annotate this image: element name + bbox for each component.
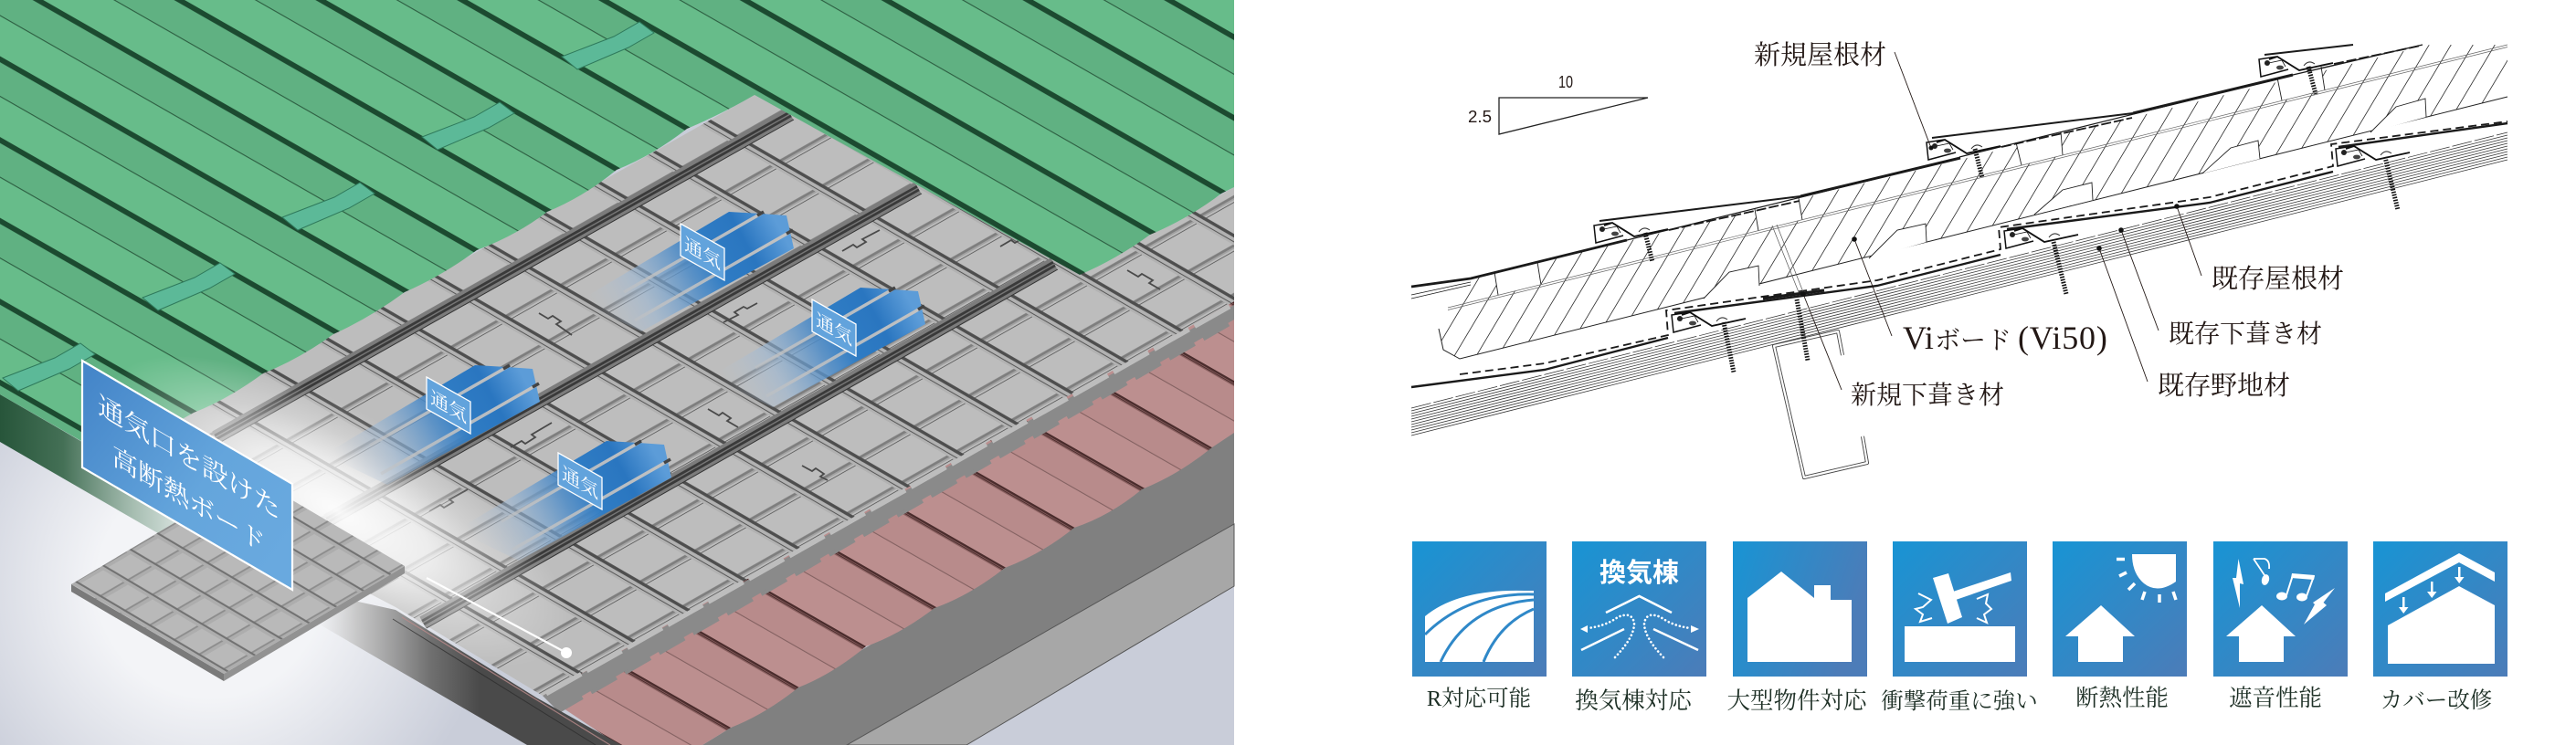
icon: 大型物件対応 [1733, 541, 1867, 677]
icon: 換気棟対応: 換気棟 [1599, 558, 1679, 588]
label: 新規下葺き材: 新規下葺き材 [1851, 381, 2004, 410]
ventilation rails [216, 114, 1058, 628]
sign: 通気: 通気 [816, 309, 852, 350]
label: 既存下葺き材: 既存下葺き材 [2169, 320, 2322, 349]
vent 4 [456, 441, 671, 561]
label: Viボード（Vi50）: Vi [1903, 320, 1934, 356]
slope triangle 10 : 2.5: 10 [1558, 73, 1573, 91]
existing pink roof [536, 301, 1234, 745]
label: 既存下葺き材 [2118, 227, 2322, 349]
panel: roof cross-section drawing [1411, 39, 2507, 477]
panel: isometric roof illustration [0, 0, 1234, 745]
label: 新規下葺き材 [1800, 291, 2004, 410]
board side edge [543, 305, 1234, 710]
slope triangle 10 : 2.5 [1468, 73, 1648, 134]
icon: カバー改修 [2373, 541, 2507, 677]
caption: 断熱性能: 断熱性能 [2075, 685, 2169, 711]
icon: 断熱性能 [2053, 541, 2187, 677]
new roof sheets [1411, 45, 2423, 299]
purlin bracket [1774, 331, 1867, 477]
label: 既存屋根材: 既存屋根材 [2212, 263, 2344, 294]
sign: 通気: 通気 [430, 386, 467, 427]
label: 既存野地材: 既存野地材 [2158, 371, 2290, 401]
label: 新規屋根材: 新規屋根材 [1754, 39, 1886, 70]
stepped board joints [429, 226, 1160, 511]
sign: 通気 [558, 453, 602, 509]
label: 新規屋根材 [1754, 39, 1933, 150]
sign: 通気 [681, 224, 724, 280]
icon: R対応可能 [1412, 541, 1547, 677]
caption: カバー改修: カバー改修 [2381, 687, 2492, 713]
single insulation board [71, 477, 405, 681]
label: Viボード（Vi50） [1852, 236, 2108, 356]
background [0, 0, 1234, 745]
caption: 遮音性能: 遮音性能 [2229, 685, 2322, 711]
sign: 通気 [427, 377, 470, 434]
hatched new board Vi50 [1439, 45, 2507, 359]
fastening clips [1594, 57, 2410, 332]
icon: 衝撃荷重に強い [1893, 541, 2027, 677]
icon: 換気棟対応 [1572, 541, 1706, 677]
existing structure dark band [702, 429, 1234, 745]
label: 既存屋根材 [2174, 204, 2344, 294]
green roof side edge [0, 394, 210, 563]
vent 3 [324, 365, 540, 485]
vent 2 [710, 288, 925, 407]
white fade over the board [63, 296, 613, 727]
label: Viボード（Vi50）: (Vi50) [2018, 320, 2108, 356]
sign: 通気: 通気 [684, 233, 721, 274]
callout: 通気口を設けた高断熱ボード [82, 361, 292, 590]
leader line with dot [427, 578, 572, 658]
callout: 通気口を設けた高断熱ボード: 通気口を設けた [98, 390, 280, 526]
existing deck boards [1411, 132, 2507, 435]
caption: R対応可能: R対応可能 [1427, 686, 1531, 711]
green roof overlap joints [3, 22, 654, 391]
grey insulation board field [111, 95, 1234, 696]
existing structure light band [847, 524, 1234, 745]
panel: feature icons [1412, 541, 2507, 714]
existing underlayment dashed line [1460, 121, 2507, 374]
label: 既存野地材 [2096, 246, 2290, 401]
existing roof sheet [1411, 123, 2507, 387]
slope triangle 10 : 2.5: 2.5 [1468, 108, 1492, 126]
sign: 通気: 通気 [562, 462, 598, 503]
caption: 大型物件対応: 大型物件対応 [1726, 687, 1868, 714]
green new roof sheets [0, 0, 1234, 458]
caption: 衝撃荷重に強い: 衝撃荷重に強い [1881, 688, 2038, 714]
caption: 換気棟対応: 換気棟対応 [1575, 687, 1693, 714]
callout: 通気口を設けた高断熱ボード: 高断熱ボード [112, 441, 266, 560]
screws [1645, 67, 2398, 372]
label: Viボード（Vi50）: ボード [1935, 327, 2011, 355]
vent 1 [578, 212, 794, 331]
sign: 通気 [812, 299, 856, 356]
icon: 遮音性能 [2213, 541, 2348, 677]
roof side wedge [313, 600, 621, 745]
